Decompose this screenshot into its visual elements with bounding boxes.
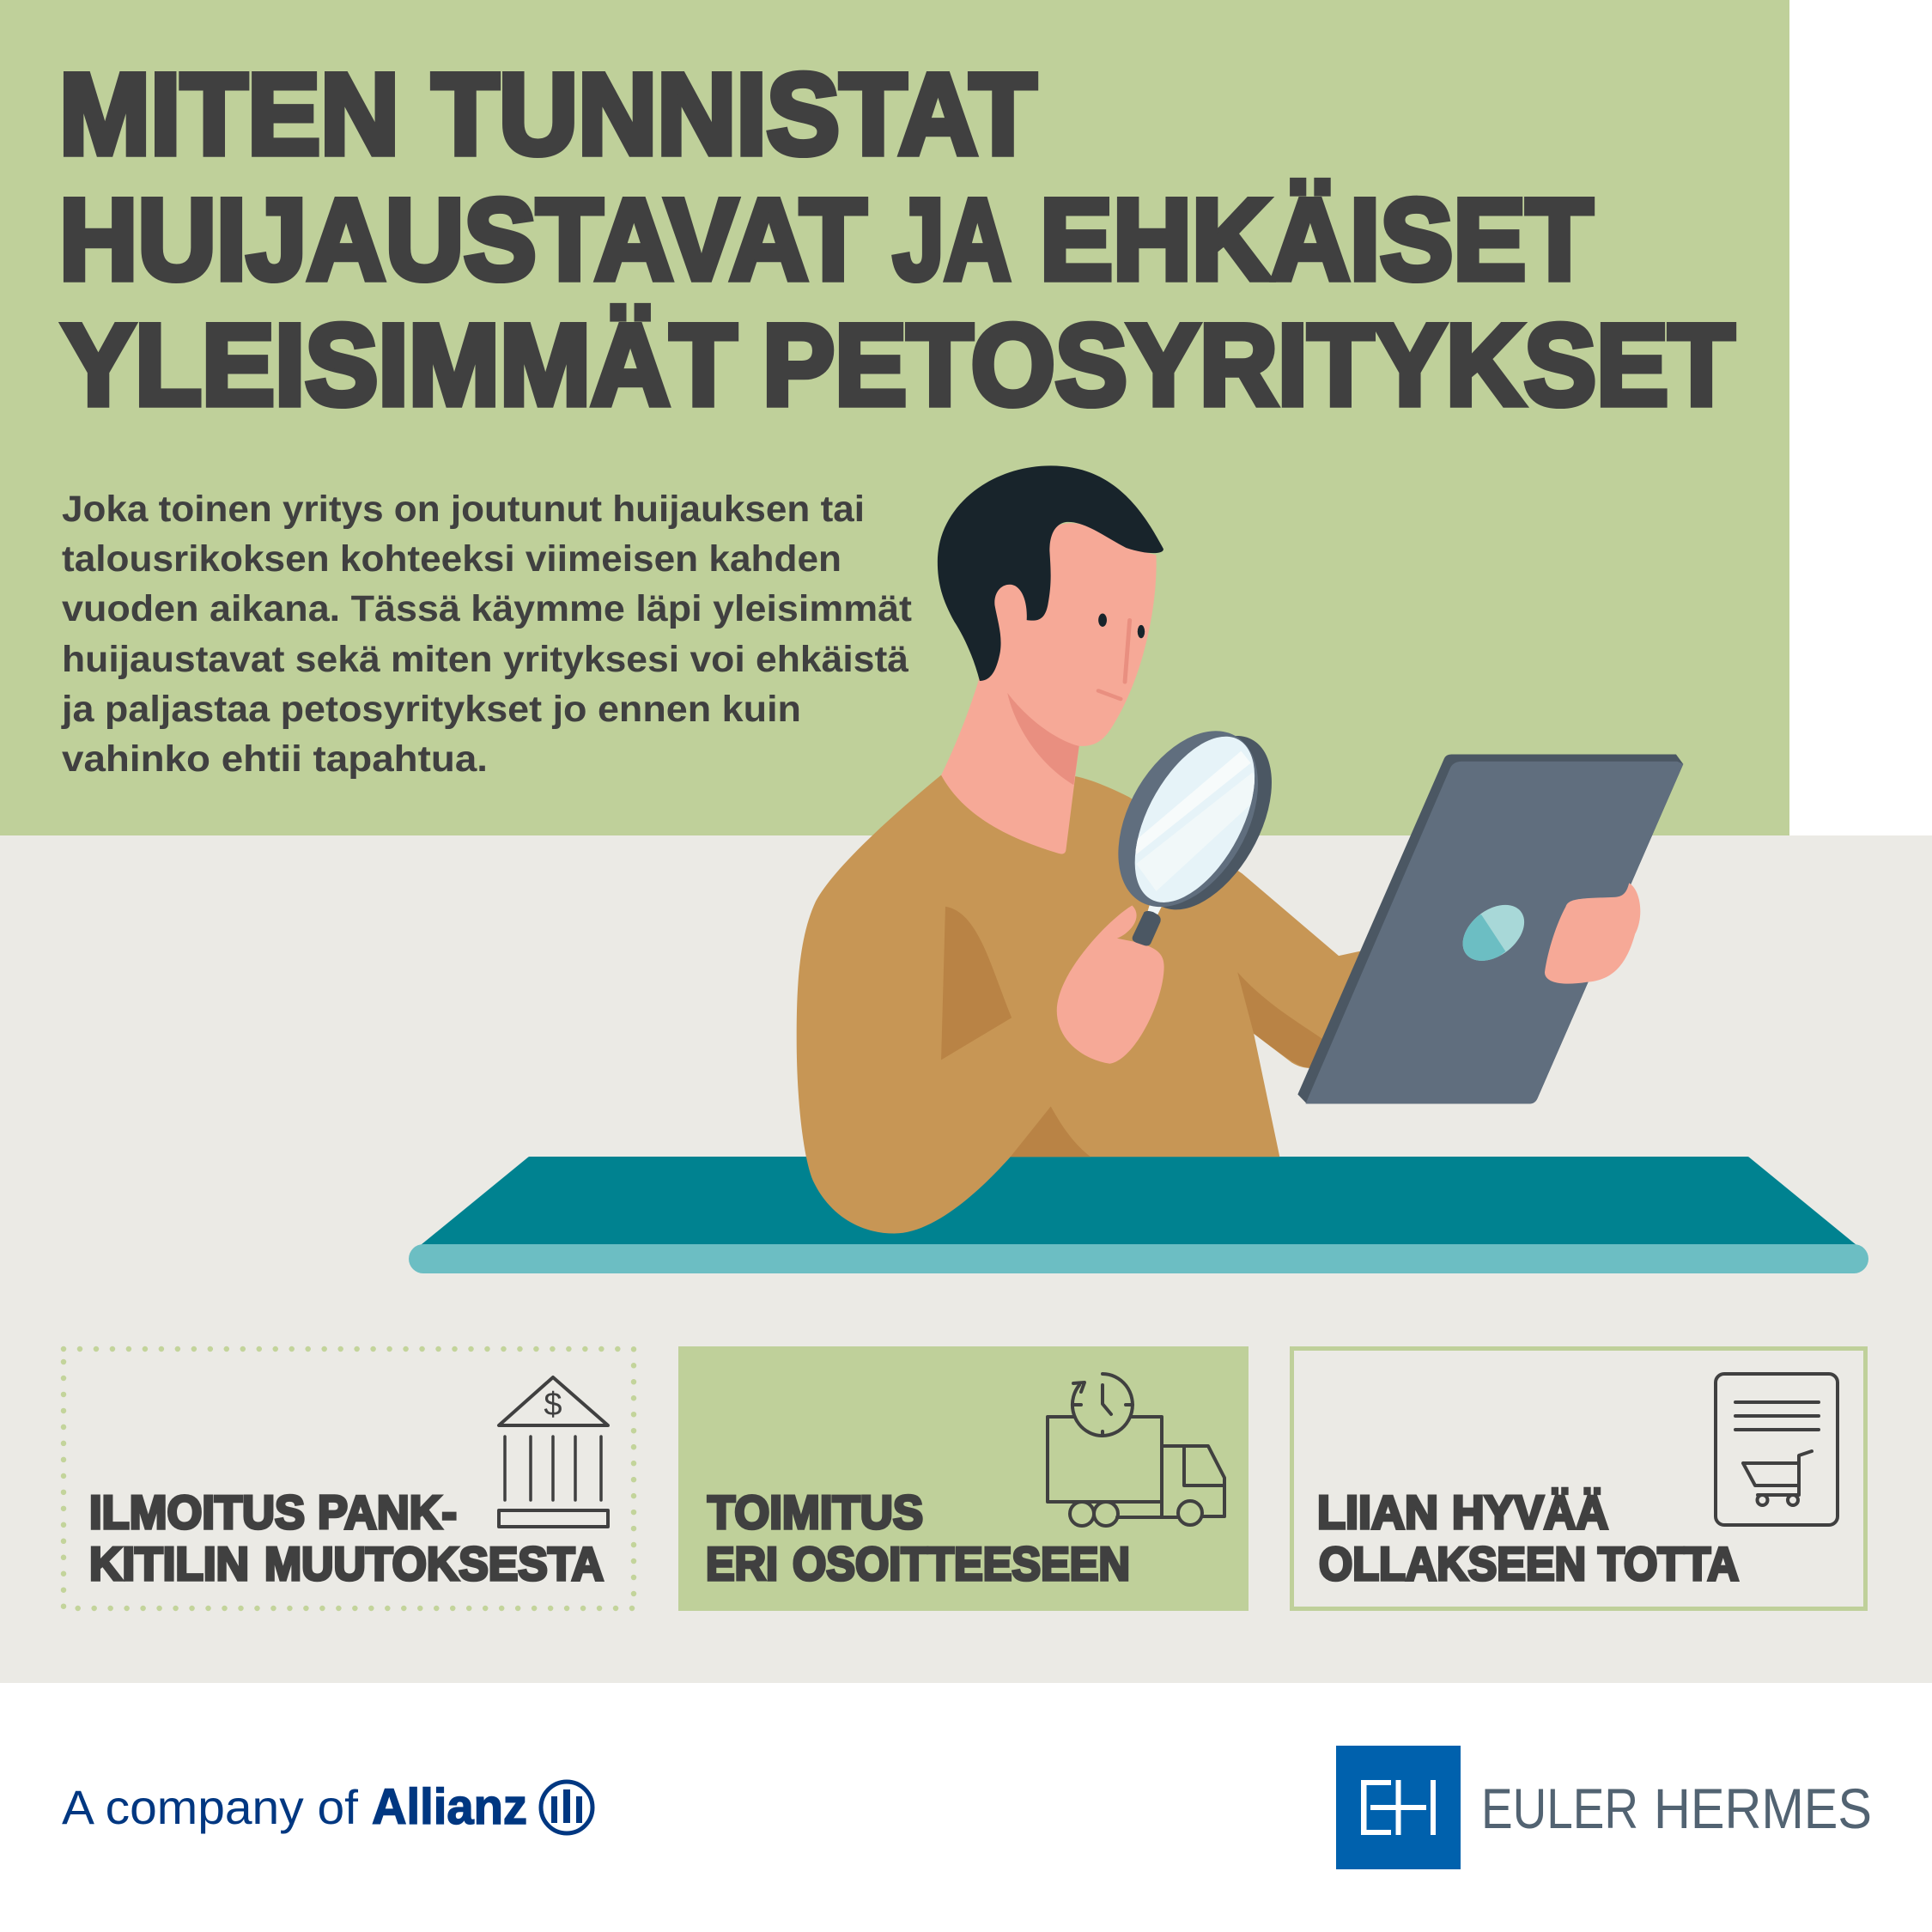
heading: too good: LIIAN (1317, 1485, 1438, 1539)
heading: delivery (706, 1485, 1130, 1590)
eyes (1098, 614, 1145, 638)
heading: bank account (89, 1485, 604, 1590)
icon: bank: $ (544, 1387, 562, 1423)
title (59, 51, 1735, 429)
chin shadow (1007, 693, 1079, 785)
logo: a company of Allianz: Allianz (372, 1779, 527, 1835)
hair (938, 465, 1163, 681)
heading: bank account: KITILIN (89, 1537, 249, 1590)
title: TUNNISTAT (432, 51, 1036, 179)
tablet (1297, 754, 1683, 1103)
title: JA (893, 176, 1011, 304)
background: grey lower section (0, 835, 1932, 1683)
panel: delivery to other address (678, 1346, 1249, 1611)
left hand (1057, 905, 1164, 1064)
nose and mouth (1098, 620, 1130, 699)
heading: too good (1317, 1485, 1739, 1590)
logo: Euler Hermes (1336, 1746, 1872, 1869)
table (409, 1159, 1868, 1273)
heading: too good: TOTTA (1598, 1537, 1739, 1590)
intro text block (61, 489, 912, 780)
logo: a company of Allianz (62, 1779, 592, 1835)
title: HUIJAUSTAVAT (59, 176, 866, 304)
heading: delivery: OSOITTEESEEN (793, 1537, 1130, 1590)
magnifier (1118, 731, 1272, 915)
heading: bank account: MUUTOKSESTA (264, 1537, 604, 1590)
intro text block: Joka toinen yritys on joutunut huijauksen tai (62, 489, 865, 530)
heading: delivery: ERI (706, 1537, 778, 1590)
sweater shadows (941, 907, 1325, 1157)
title: PETOSYRITYKSET (762, 301, 1735, 429)
heading: too good: HYVÄÄ (1452, 1485, 1608, 1539)
icon: bank (499, 1377, 608, 1527)
heading: bank account: PANK- (318, 1485, 457, 1539)
icon: shopping list with cart (1716, 1374, 1838, 1525)
panel: green header (0, 0, 1789, 835)
logo: Euler Hermes: HERMES (1654, 1777, 1872, 1840)
icon: EH square (1336, 1746, 1461, 1869)
intro text block: huijaustavat sekä miten yrityksesi voi ehkäistä (62, 639, 909, 680)
logo: Euler Hermes: EULER (1481, 1777, 1638, 1840)
heading: bank account: ILMOITUS (89, 1485, 305, 1539)
logo: a company of Allianz: A company of (62, 1780, 358, 1834)
icon: Allianz mark (541, 1782, 592, 1833)
title: MITEN (59, 51, 399, 179)
heading: delivery: TOIMITUS (708, 1485, 923, 1539)
icon: truck and clock (1048, 1374, 1224, 1526)
intro text block: vahinko ehtii tapahtua. (62, 738, 488, 780)
title: EHKÄISET (1040, 176, 1593, 304)
panel: bank account notice (64, 1349, 634, 1608)
head and neck (941, 523, 1157, 854)
illustration: man with magnifier and tablet (797, 465, 1683, 1234)
intro text block: talousrikoksen kohteeksi viimeisen kahden (62, 538, 841, 580)
panel: too good to be true (1291, 1348, 1865, 1609)
title: YLEISIMMÄT (62, 301, 737, 429)
intro text block: vuoden aikana. Tässä käymme läpi yleisimmät (62, 588, 912, 629)
intro text block: ja paljastaa petosyritykset jo ennen kuin (61, 689, 801, 730)
magnifier handle (1133, 911, 1161, 946)
sweater (797, 775, 1364, 1234)
heading: too good: OLLAKSEEN (1319, 1537, 1586, 1590)
right hand (1545, 883, 1640, 984)
dotted border (64, 1349, 634, 1608)
